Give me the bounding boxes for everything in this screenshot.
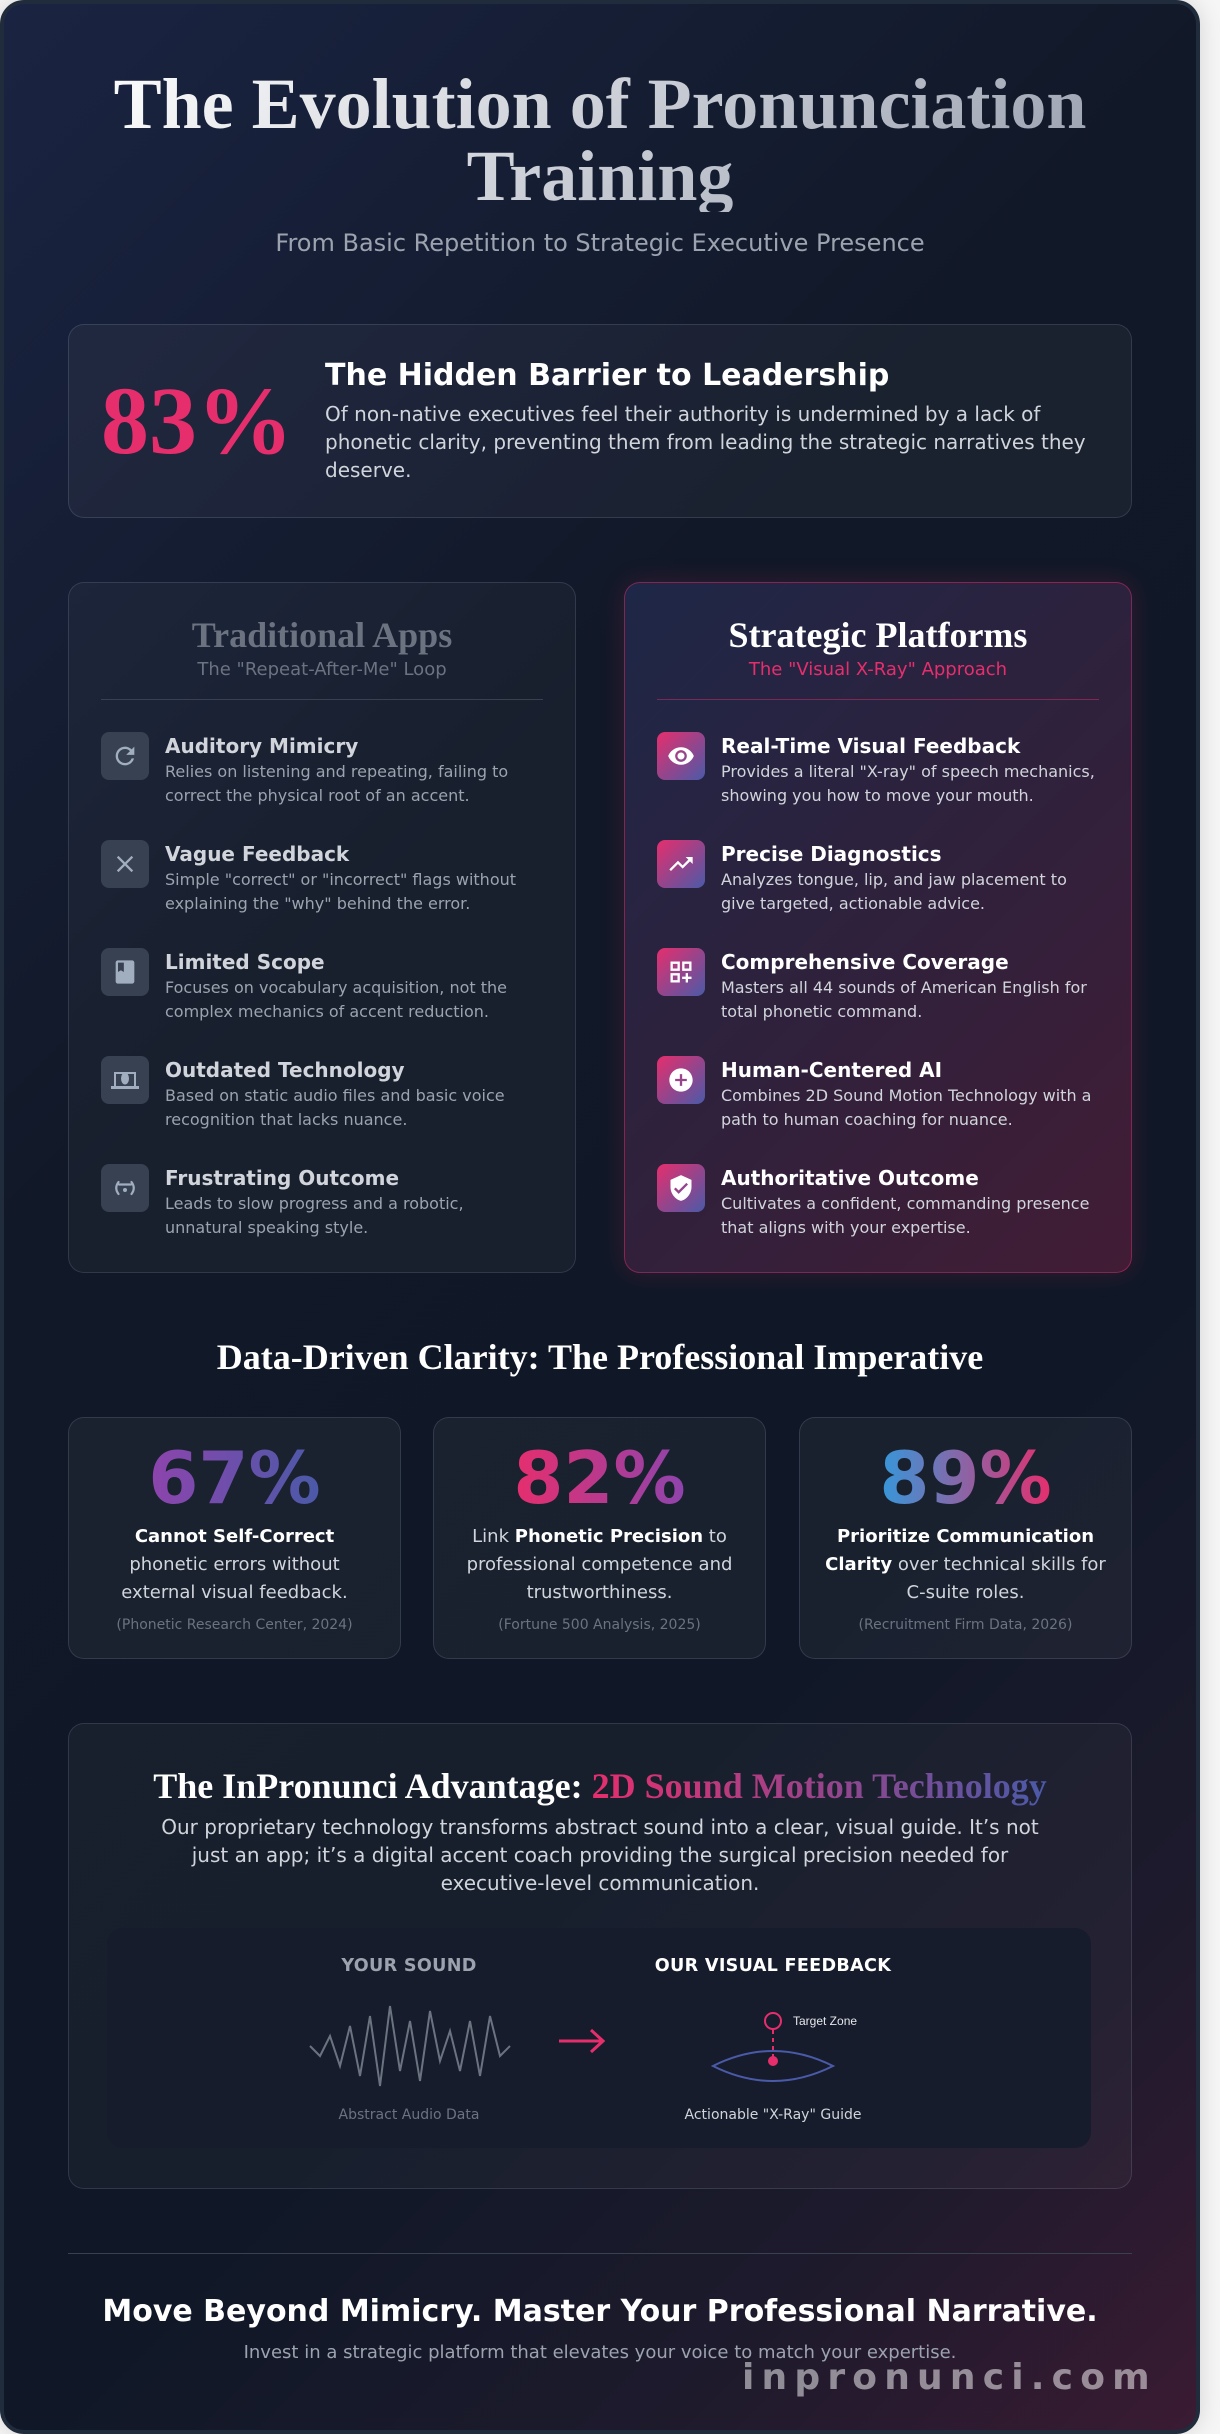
- description: Link Phonetic Precision to: [472, 1526, 727, 1547]
- item: outdated technology: [101, 1056, 505, 1129]
- icon: laptop: [101, 1056, 149, 1104]
- item: human-centered ai: Human-Centered AI: [721, 1058, 942, 1082]
- item: human-centered ai: path to human coaching for nuance.: [721, 1110, 1013, 1129]
- icon: book: [101, 948, 149, 996]
- item: outdated technology: Outdated Technology: [165, 1058, 405, 1082]
- item: precise diagnostics: [657, 840, 1067, 913]
- item: outdated technology: Based on static audio files and basic voice: [165, 1086, 505, 1105]
- big stat 83%: 83%: [101, 367, 293, 474]
- item: auditory mimicry: correct the physical root of an accent.: [165, 786, 470, 805]
- item: frustrating outcome: Frustrating Outcome: [165, 1166, 399, 1190]
- title: Training: [467, 136, 733, 216]
- item: authoritative outcome: Authoritative Outcome: [721, 1166, 979, 1190]
- item: real-time visual feedback: [657, 732, 1095, 805]
- description: Prioritize Communication: [837, 1526, 1094, 1547]
- column subheading: The "Repeat-After-Me" Loop: [197, 659, 447, 680]
- abstract audio label: Abstract Audio Data: [339, 2107, 479, 2123]
- stat card: 82%: [433, 1417, 766, 1659]
- item: precise diagnostics: give targeted, actionable advice.: [721, 894, 985, 913]
- x-ray guide diagram: Target Zone: [793, 2014, 857, 2028]
- icon: trending up: [657, 840, 705, 888]
- icon: plus circle: [657, 1056, 705, 1104]
- item: authoritative outcome: Cultivates a confident, commanding presence: [721, 1194, 1089, 1213]
- description: Cannot Self-Correct: [135, 1526, 334, 1547]
- item: outdated technology: recognition that lacks nuance.: [165, 1110, 407, 1129]
- icon: grid plus: [657, 948, 705, 996]
- body text: deserve.: [325, 458, 411, 482]
- item: limited scope: complex mechanics of accent reduction.: [165, 1002, 489, 1021]
- panel: strategic platforms: [624, 582, 1132, 1273]
- item: vague feedback: Simple "correct" or "incorrect" flags without: [165, 870, 516, 889]
- description: [121, 1526, 348, 1603]
- number: 82%: [513, 1436, 686, 1520]
- item: auditory mimicry: [101, 732, 508, 805]
- item: limited scope: Focuses on vocabulary acquisition, not the: [165, 978, 507, 997]
- item: frustrating outcome: unnatural speaking style.: [165, 1218, 368, 1237]
- panel: inpronunci advantage: [68, 1723, 1132, 2189]
- number: 67%: [148, 1436, 321, 1520]
- heading: The Hidden Barrier to Leadership: [325, 358, 889, 393]
- icon: eye: [657, 732, 705, 780]
- body text: [325, 402, 1086, 482]
- description: phonetic errors without: [129, 1554, 340, 1575]
- title: The Evolution of Pronunciation: [114, 64, 1086, 144]
- body text: Of non-native executives feel their authority is undermined by a lack of: [325, 402, 1040, 426]
- panel: traditional apps: [68, 582, 576, 1273]
- description: [825, 1526, 1106, 1603]
- item: real-time visual feedback: Provides a literal "X-ray" of speech mechanics,: [721, 762, 1095, 781]
- description: C-suite roles.: [907, 1582, 1024, 1603]
- column heading: Strategic Platforms: [729, 615, 1027, 655]
- description: Clarity over technical skills for: [825, 1554, 1106, 1575]
- item: auditory mimicry: Relies on listening and repeating, failing to: [165, 762, 508, 781]
- item: precise diagnostics: Precise Diagnostics: [721, 842, 942, 866]
- title: [68, 68, 1132, 212]
- call to action subtext: Invest in a strategic platform that elevates your voice to match your expertise.: [244, 2342, 956, 2363]
- item: vague feedback: Vague Feedback: [165, 842, 349, 866]
- section heading: data-driven clarity: Data-Driven Clarity: The Professional Imperative: [217, 1337, 983, 1377]
- item: real-time visual feedback: Real-Time Visual Feedback: [721, 734, 1020, 758]
- our visual feedback label: OUR VISUAL FEEDBACK: [655, 1956, 891, 1976]
- item: real-time visual feedback: showing you how to move your mouth.: [721, 786, 1034, 805]
- x-ray guide diagram: [711, 2012, 857, 2082]
- item: comprehensive coverage: Comprehensive Coverage: [721, 950, 1009, 974]
- subtitle: From Basic Repetition to Strategic Executive Presence: [275, 229, 925, 257]
- column heading: Traditional Apps: [192, 615, 452, 655]
- column subheading: The "Visual X-Ray" Approach: [749, 659, 1007, 680]
- item: frustrating outcome: Leads to slow progress and a robotic,: [165, 1194, 464, 1213]
- description: external visual feedback.: [121, 1582, 348, 1603]
- item: human-centered ai: [657, 1056, 1091, 1129]
- arrow: [559, 2028, 605, 2053]
- number: 89%: [879, 1436, 1052, 1520]
- source: (Recruitment Firm Data, 2026): [859, 1617, 1072, 1633]
- icon: robot face: [101, 1164, 149, 1212]
- description: trustworthiness.: [527, 1582, 672, 1603]
- your sound label: YOUR SOUND: [341, 1956, 477, 1976]
- panel text: executive-level communication.: [441, 1871, 759, 1895]
- item: vague feedback: [101, 840, 516, 913]
- source: (Fortune 500 Analysis, 2025): [498, 1617, 701, 1633]
- panel text: Our proprietary technology transforms abstract sound into a clear, visual guide. It’s not: [161, 1815, 1039, 1839]
- source: (Phonetic Research Center, 2024): [116, 1617, 353, 1633]
- description: [467, 1526, 732, 1603]
- icon: shield check: [657, 1164, 705, 1212]
- panel: hidden barrier stat: [68, 324, 1132, 518]
- body text: phonetic clarity, preventing them from leading the strategic narratives they: [325, 430, 1086, 454]
- panel text: [161, 1815, 1039, 1895]
- panel text: just an app; it’s a digital accent coach providing the surgical precision needed for: [192, 1843, 1008, 1867]
- panel heading: The InPronunci Advantage: 2D Sound Motion Technology: [153, 1766, 1047, 1806]
- icon: close: [101, 840, 149, 888]
- watermark: inpronunci.com: [742, 2357, 1157, 2398]
- item: frustrating outcome: [101, 1164, 464, 1237]
- stat card: 89%: [799, 1417, 1132, 1659]
- item: limited scope: Limited Scope: [165, 950, 325, 974]
- description: professional competence and: [467, 1554, 732, 1575]
- item: comprehensive coverage: Masters all 44 sounds of American English for: [721, 978, 1087, 997]
- item: auditory mimicry: Auditory Mimicry: [165, 734, 358, 758]
- diagram panel: [107, 1928, 1091, 2148]
- icon: refresh: [101, 732, 149, 780]
- item: precise diagnostics: Analyzes tongue, lip, and jaw placement to: [721, 870, 1067, 889]
- item: vague feedback: explaining the "why" behind the error.: [165, 894, 470, 913]
- waveform: [309, 2006, 511, 2086]
- item: human-centered ai: Combines 2D Sound Motion Technology with a: [721, 1086, 1091, 1105]
- stat card: 67%: [68, 1417, 401, 1659]
- call to action: Move Beyond Mimicry. Master Your Professional Narrative.: [102, 2294, 1098, 2329]
- item: authoritative outcome: that aligns with your expertise.: [721, 1218, 971, 1237]
- x-ray guide label: Actionable "X-Ray" Guide: [685, 2107, 861, 2123]
- item: comprehensive coverage: [657, 948, 1087, 1021]
- item: limited scope: [101, 948, 507, 1021]
- item: authoritative outcome: [657, 1164, 1089, 1237]
- item: comprehensive coverage: total phonetic command.: [721, 1002, 922, 1021]
